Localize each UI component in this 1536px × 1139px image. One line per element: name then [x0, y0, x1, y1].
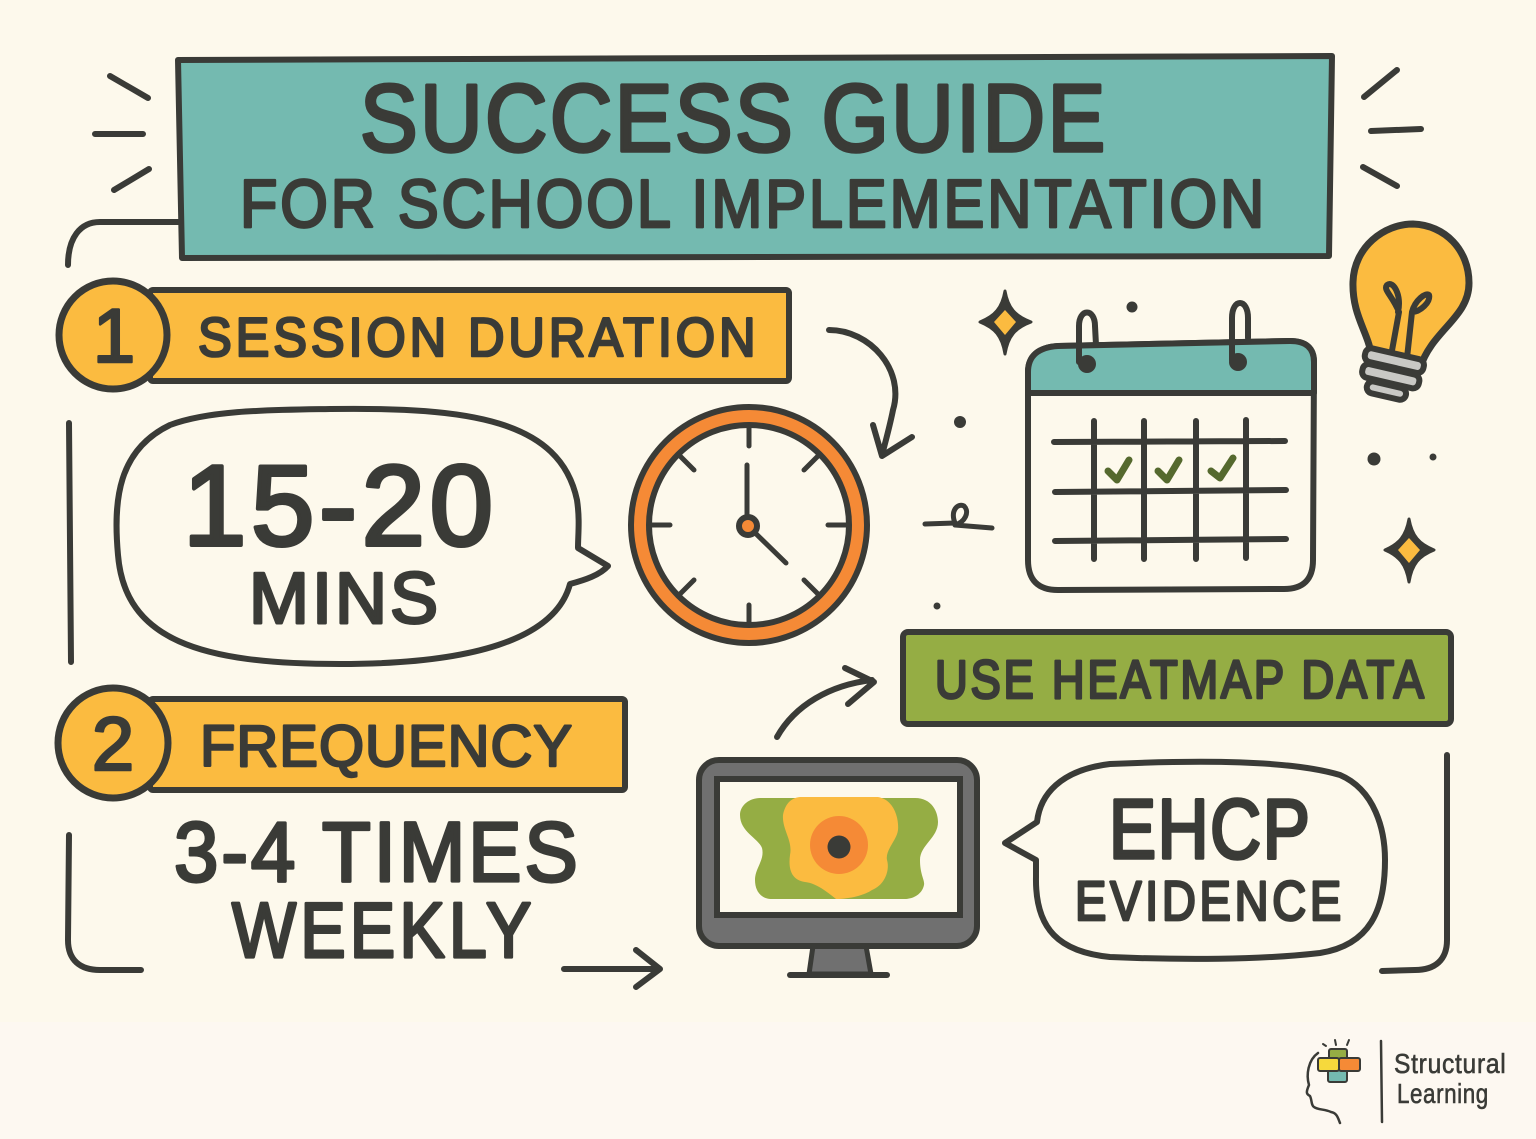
speech bubble: EHCP evidence: EHCP	[1109, 783, 1310, 876]
burst lines left of banner	[95, 76, 149, 190]
decorative dots	[934, 302, 1436, 610]
burst lines right of banner	[1363, 70, 1421, 186]
text: 3-4 times weekly: WEEKLY	[232, 888, 531, 974]
logo icon: head with blocks	[1307, 1040, 1360, 1123]
left bracket of section 2	[68, 835, 141, 970]
right bracket of section 2	[1382, 755, 1447, 971]
text: 3-4 times weekly	[174, 806, 578, 974]
logo: structural learning: Learning	[1397, 1079, 1488, 1110]
arrow toward monitor	[564, 950, 660, 987]
connector from banner to step one	[68, 222, 180, 265]
section 1 heading: session duration: SESSION DURATION	[198, 307, 756, 368]
section 1 heading: session duration: 1	[93, 294, 135, 379]
speech bubble: EHCP evidence: EVIDENCE	[1075, 869, 1341, 932]
speech bubble: 15-20 mins: MINS	[249, 559, 438, 639]
subtitle: FOR SCHOOL IMPLEMENTATION	[240, 165, 1264, 242]
icon: light bulb	[1353, 224, 1469, 403]
sparkle	[1385, 519, 1434, 582]
icon: calendar	[1028, 303, 1314, 590]
icon: clock	[631, 407, 867, 643]
left bracket line of section 1	[69, 423, 71, 662]
callout: use heatmap data: USE HEATMAP DATA	[935, 649, 1425, 710]
speech bubble: 15-20 mins	[116, 409, 608, 664]
title banner	[178, 56, 1332, 258]
logo: structural learning	[1307, 1040, 1506, 1123]
logo: structural learning: Structural	[1394, 1048, 1506, 1079]
squiggle mark	[925, 505, 992, 528]
section 1 heading: session duration	[59, 281, 789, 389]
icon: monitor with heatmap	[699, 760, 977, 975]
section 2 heading: frequency	[58, 688, 625, 798]
speech bubble: 15-20 mins: 15-20	[183, 443, 493, 570]
arrow from monitor to heatmap callout	[777, 668, 874, 737]
section 2 heading: frequency: FREQUENCY	[200, 714, 572, 779]
sparkle	[980, 291, 1031, 354]
title: success guide: SUCCESS GUIDE	[360, 65, 1105, 172]
text: 3-4 times weekly: 3-4 TIMES	[174, 806, 578, 899]
callout: use heatmap data	[903, 632, 1451, 724]
speech bubble: EHCP evidence	[1005, 762, 1385, 959]
heatmap	[740, 797, 938, 899]
arrow from heading to clock	[829, 330, 912, 456]
section 2 heading: frequency: 2	[92, 702, 134, 787]
